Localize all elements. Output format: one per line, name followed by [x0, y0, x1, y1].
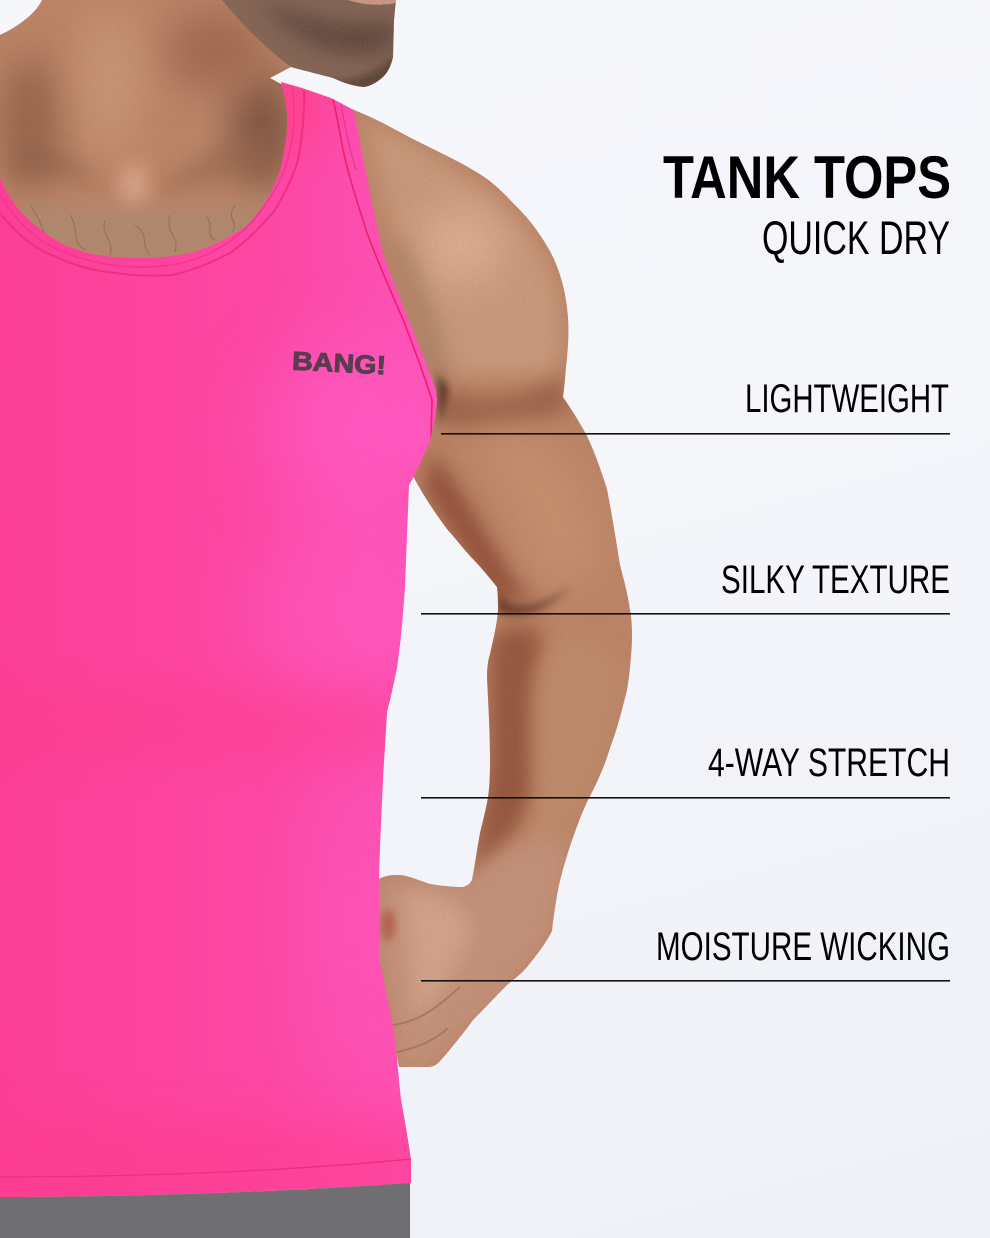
neck binding seams	[0, 90, 304, 276]
inner elbow crease	[497, 588, 570, 615]
wrist and hand	[379, 840, 570, 1070]
armpit and tricep shadow	[437, 375, 570, 427]
skin: neck, shoulder, arm and hand	[0, 0, 632, 1067]
chest hair area	[34, 209, 250, 258]
tank top	[0, 0, 440, 1210]
shoulder tones	[365, 120, 562, 375]
neck shading	[2, 55, 58, 195]
armhole seams	[333, 99, 432, 440]
upper arm	[425, 450, 540, 605]
tank logo: BANG!	[291, 346, 387, 380]
hem seam	[0, 1159, 411, 1177]
shorts	[0, 1183, 410, 1238]
fabric shading	[281, 82, 334, 158]
skin texture	[88, 35, 564, 1012]
knuckle	[381, 909, 395, 941]
forearm	[472, 625, 545, 880]
collarbone shadow and highlight	[22, 151, 94, 186]
photo: model	[0, 0, 700, 1238]
beard and chin	[222, 0, 396, 87]
